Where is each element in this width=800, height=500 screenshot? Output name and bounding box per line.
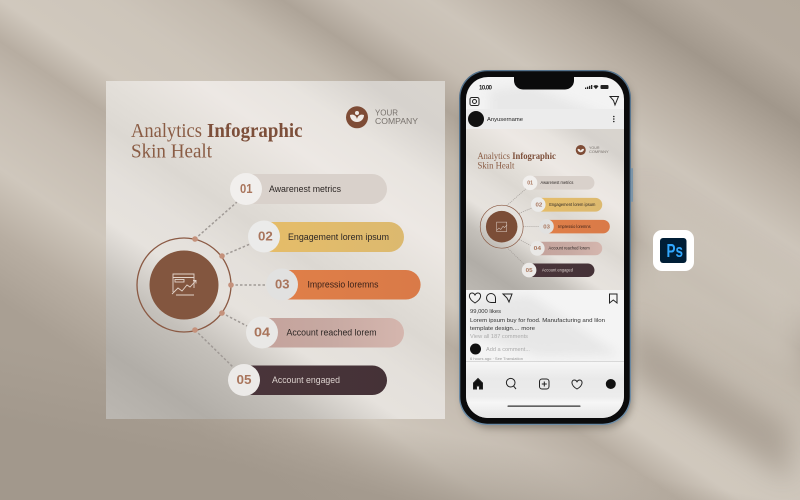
item 4 (246, 316, 404, 348)
item 1: Awarenest metrics (269, 184, 341, 194)
item 3 (266, 268, 421, 300)
icon: chart window (172, 274, 196, 295)
item 5: 05 (236, 373, 252, 387)
post inside phone: Skin Healt (477, 161, 515, 171)
post inside phone: 04 (534, 246, 542, 252)
notch (514, 77, 574, 90)
icon: Photoshop badge: Ps (666, 241, 683, 261)
title: Analytics (131, 120, 202, 142)
status bar (479, 85, 608, 90)
caption (470, 309, 605, 361)
item 2 (248, 220, 404, 252)
post inside phone: 02 (536, 202, 542, 208)
post inside phone: Infographic (512, 152, 556, 162)
logo: COMPANY (375, 116, 418, 126)
title (131, 120, 302, 162)
post inside phone: Analytics (477, 152, 510, 162)
caption: 6 hours ago · See Translation (470, 357, 523, 361)
post inside phone: Awarenest metrics (541, 180, 573, 185)
caption: template design.... more (470, 326, 535, 332)
title: Skin Healt (131, 140, 212, 162)
item 3: 03 (275, 278, 290, 292)
caption: Lorem ipsum buy for food. Manufacturing and lilon (470, 318, 605, 324)
post inside phone: 05 (526, 268, 533, 274)
icon: Photoshop badge (653, 230, 694, 271)
post inside phone: COMPANY (589, 149, 609, 154)
status bar: 10.00 (479, 86, 493, 92)
caption: 99,000 likes (470, 309, 502, 315)
post inside phone: 03 (543, 224, 550, 230)
item 2: 02 (258, 230, 273, 244)
item 1: 01 (240, 182, 253, 196)
connector lines (195, 202, 266, 367)
phone shadow (463, 75, 632, 428)
item 5 (228, 364, 387, 396)
caption: Add a comment... (486, 347, 530, 353)
item 4: Account reached lorem (286, 327, 376, 337)
post inside phone: Impressio loremns (558, 224, 591, 229)
item 5: Account engaged (272, 375, 340, 385)
item 2: Engagement lorem ipsum (288, 232, 389, 242)
panel: infographic post (106, 81, 445, 419)
post inside phone: Account engaged (542, 267, 574, 272)
post inside phone: 01 (527, 181, 534, 187)
home indicator (508, 406, 580, 407)
post inside phone (466, 129, 624, 290)
item 4: 04 (254, 326, 270, 340)
caption: View all 187 comments (470, 334, 529, 340)
item 3: Impressio loremns (308, 280, 379, 290)
item 1 (230, 173, 387, 205)
logo: YOUR (375, 108, 398, 118)
phone (459, 70, 633, 425)
logo (346, 106, 418, 128)
phone frame (459, 70, 631, 425)
central circle with chart icon (137, 236, 234, 333)
title: Infographic (207, 120, 302, 142)
post inside phone: Account reached lorem (549, 246, 590, 251)
post inside phone: Engagement lorem ipsum (549, 202, 596, 207)
account row (468, 111, 615, 127)
post inside phone: YOUR (589, 145, 600, 150)
top bar icons (470, 96, 618, 106)
phone screen (466, 77, 624, 418)
bottom navigation (474, 378, 616, 389)
post action icons (469, 293, 617, 303)
account row: Anyusername (487, 117, 523, 123)
